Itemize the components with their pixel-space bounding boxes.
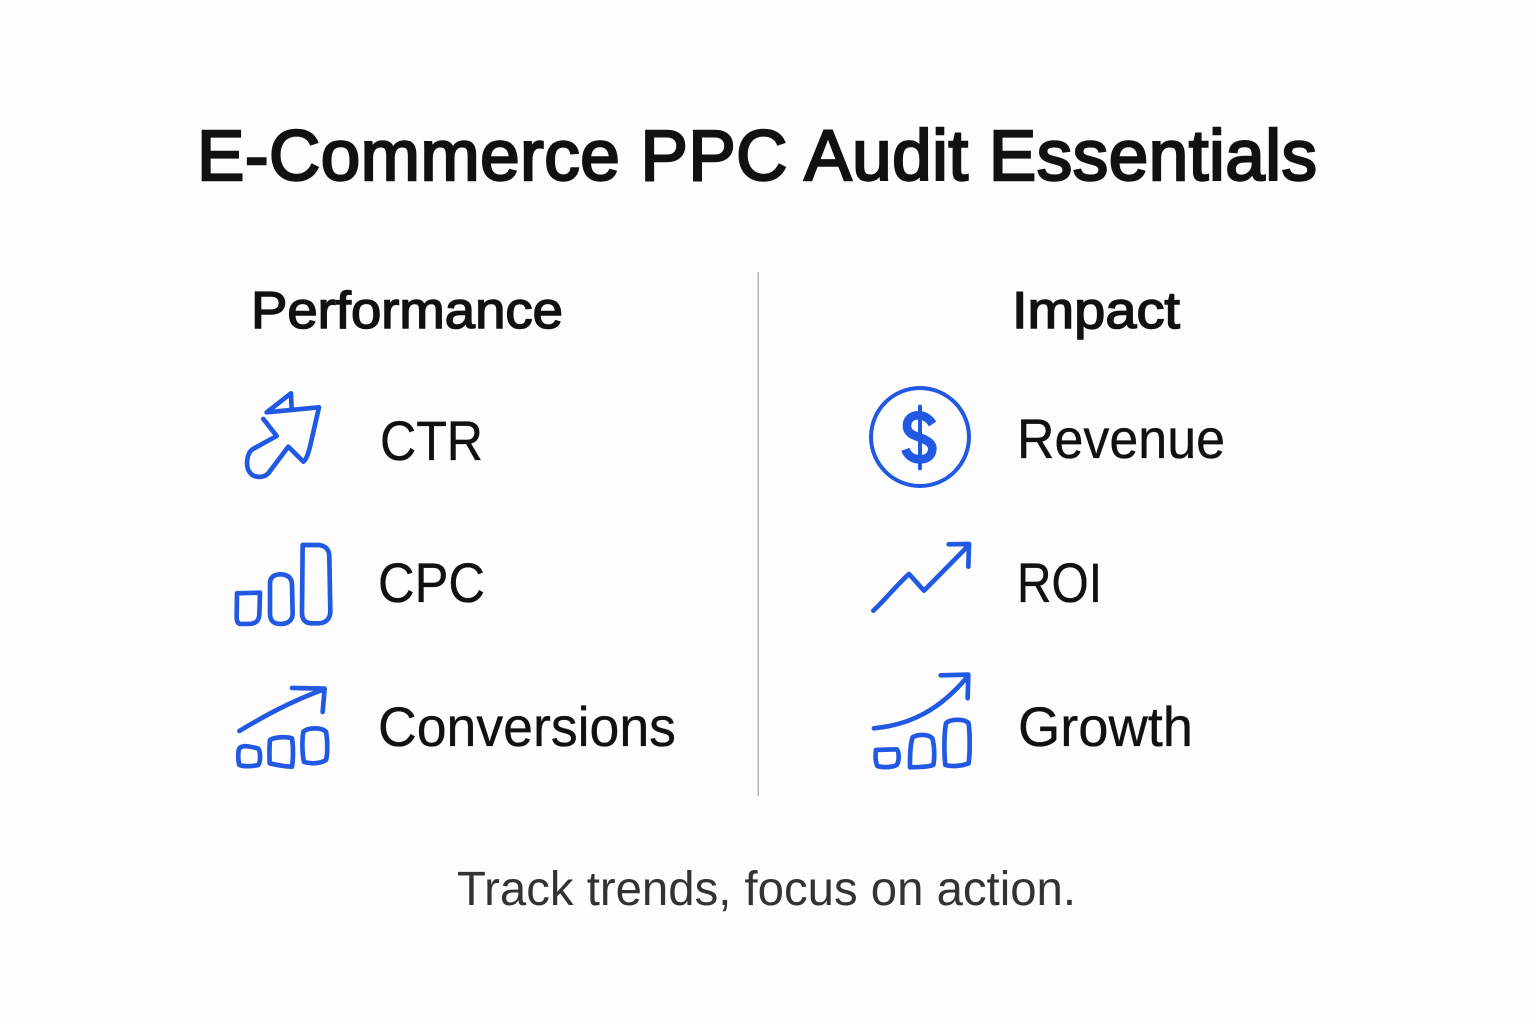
icon: bar chart (CPC)	[237, 545, 330, 624]
icon: zigzag trend arrow (ROI)	[873, 544, 969, 611]
heading: Impact: Impact	[1012, 282, 1181, 340]
heading: Performance: Performance	[251, 282, 563, 340]
label: Growth: Growth	[1018, 695, 1193, 758]
label: CTR: CTR	[380, 409, 483, 472]
label: Revenue: Revenue	[1017, 407, 1225, 470]
title: E-Commerce PPC Audit Essentials	[197, 117, 1317, 196]
icon: bars with rising arrow (Conversions)	[238, 688, 327, 767]
label: ROI: ROI	[1017, 551, 1102, 614]
label: Conversions: Conversions	[378, 695, 676, 758]
footer tagline: Track trends, focus on action.	[457, 863, 1076, 916]
label: CPC: CPC	[378, 551, 485, 614]
icon: bars with curved arrow (Growth)	[874, 675, 970, 767]
icon: cursor arrow (CTR)	[247, 393, 319, 477]
icon: dollar coin (Revenue)	[871, 388, 969, 486]
column divider	[758, 272, 759, 796]
